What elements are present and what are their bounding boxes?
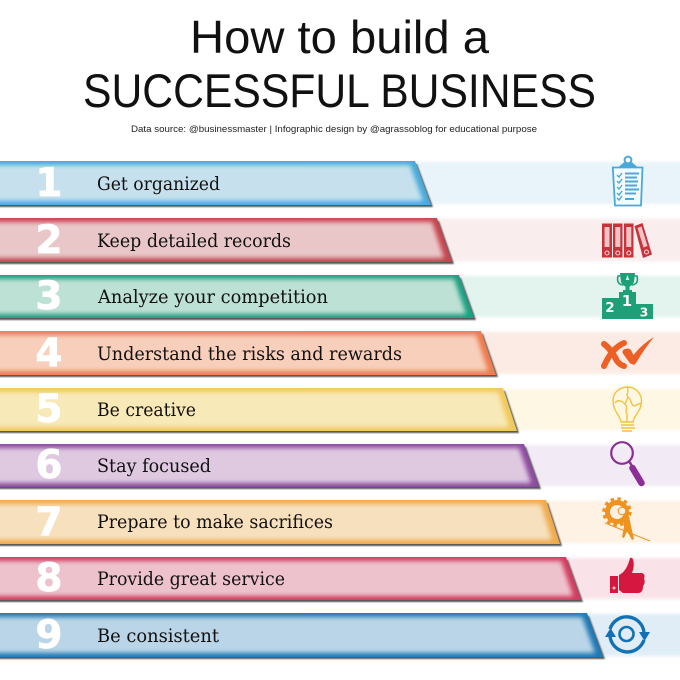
icon: trophy on podium: 1 (622, 292, 632, 310)
step 3: Analyze your competition (97, 287, 328, 308)
icon: trophy on podium: 2 (605, 300, 615, 316)
step 1: 1 (35, 161, 63, 206)
step 8: Provide great service (97, 569, 285, 590)
step 4: 4 (35, 331, 63, 376)
step 7: 7 (35, 500, 63, 545)
icon: person pushing gear (604, 499, 650, 541)
step 7: Prepare to make sacrifices (97, 512, 333, 533)
step 6: 6 (35, 443, 63, 488)
icon: clipboard (613, 157, 642, 206)
step 7 (0, 500, 680, 546)
step 5 (0, 387, 680, 433)
step 6 (0, 443, 680, 489)
step 4: Understand the risks and rewards (97, 344, 402, 365)
icon: magnifier (611, 442, 642, 483)
step 2 (0, 218, 680, 264)
icon: binders (602, 223, 652, 258)
step 3: 3 (35, 274, 63, 319)
step 1: Get organized (97, 174, 220, 195)
icon: trophy on podium (602, 273, 653, 320)
step 5: 5 (35, 387, 63, 432)
title: SUCCESSFUL BUSINESS (83, 64, 596, 117)
step 2: Keep detailed records (97, 231, 291, 252)
title: How to build a (190, 11, 489, 63)
data source line: Data source: @businessmaster | Infographic design by @agrassoblog for educational purpose (131, 124, 537, 135)
step 4 (0, 331, 680, 377)
step 8 (0, 556, 680, 602)
step 1 (0, 161, 680, 207)
step 8: 8 (35, 556, 63, 601)
step 5: Be creative (97, 400, 196, 421)
icon: cross and check (604, 337, 654, 366)
step 2: 2 (35, 218, 63, 263)
step 9: Be consistent (97, 626, 220, 647)
icon: trophy on podium: 3 (640, 304, 648, 320)
step 6: Stay focused (97, 456, 211, 477)
step 9 (0, 613, 680, 659)
step 9: 9 (35, 613, 63, 658)
icon: cycle arrows (605, 617, 650, 652)
icon: puzzle light bulb (613, 387, 642, 431)
title (83, 11, 596, 117)
step 3 (0, 274, 680, 320)
icon: thumbs up (610, 558, 645, 593)
